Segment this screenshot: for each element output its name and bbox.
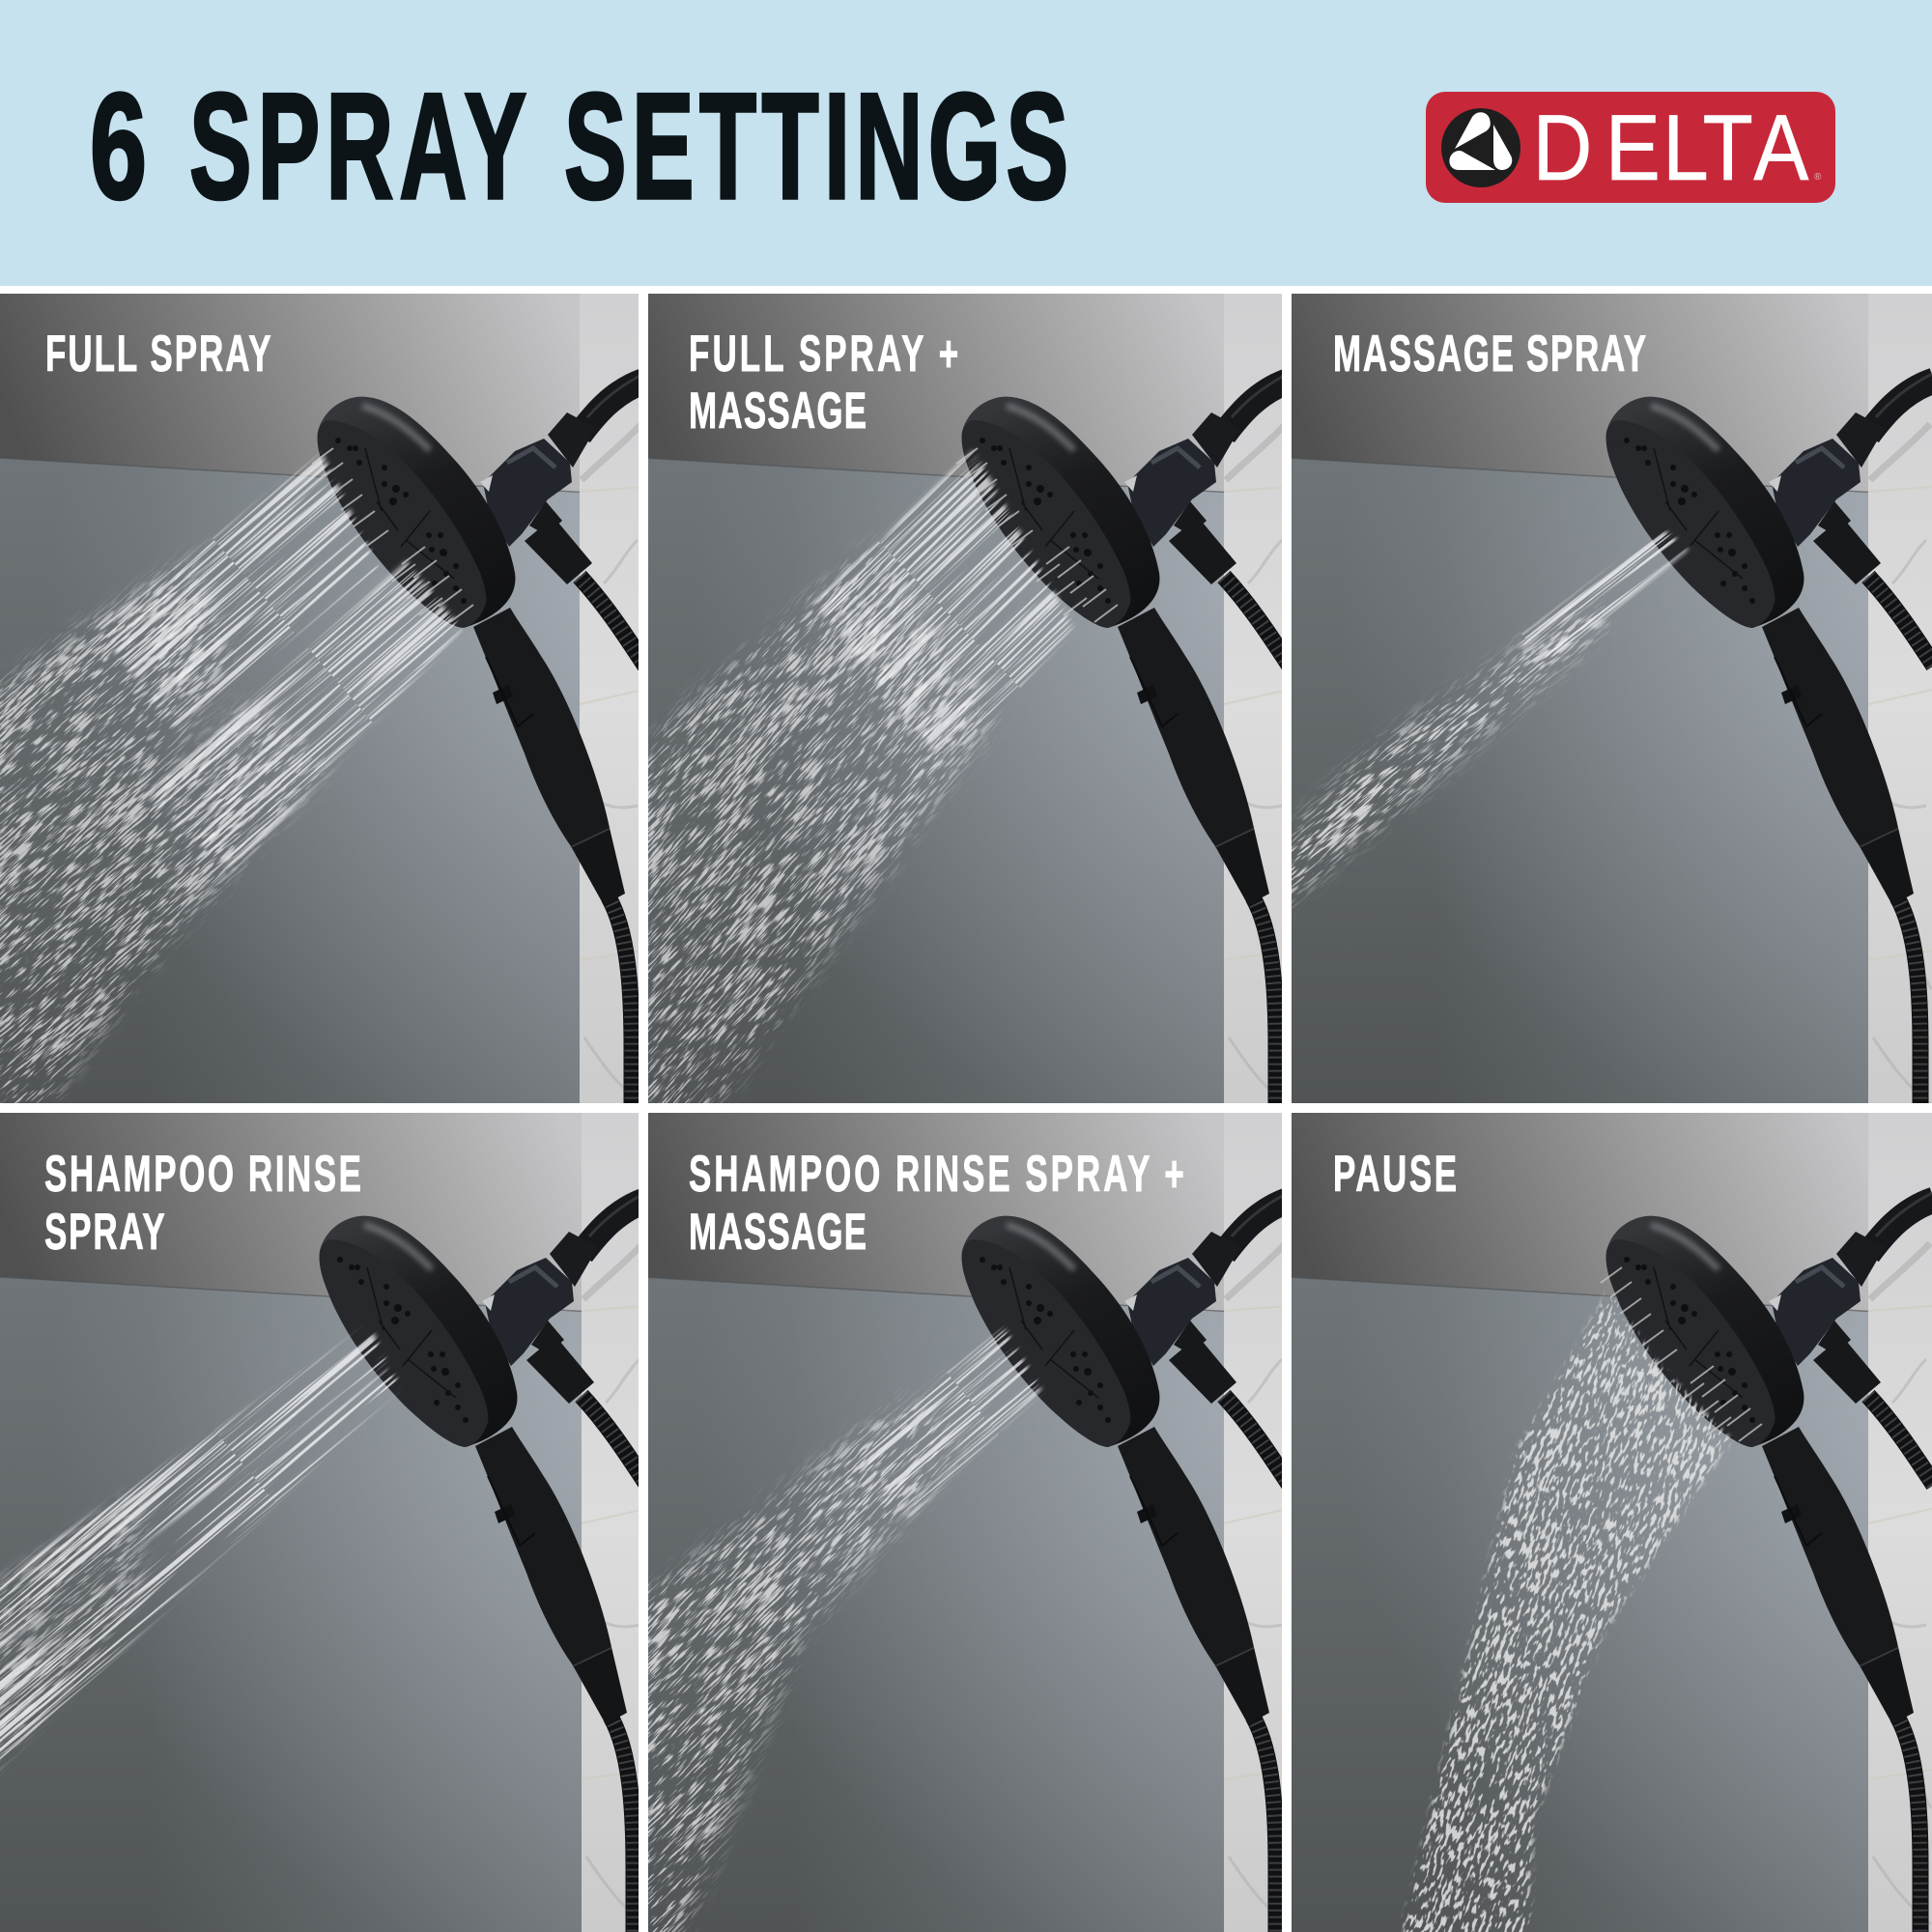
shower head: [962, 1192, 1290, 1932]
panel: shampoo rinse spray: [0, 1113, 639, 1932]
panel: full spray: [0, 294, 639, 1103]
header band: [0, 0, 1932, 286]
label: SHAMPOO RINSE SPRAY +: [689, 1145, 1184, 1203]
label: FULL SPRAY +: [689, 325, 958, 383]
label: MASSAGE: [689, 1203, 867, 1261]
label: FULL SPRAY: [45, 325, 271, 383]
title: SETTINGS: [564, 62, 1068, 231]
label: SPRAY: [44, 1203, 165, 1261]
water spray: [1292, 529, 1690, 909]
wall background: [0, 294, 643, 1113]
logo: Delta: DELTA: [1533, 96, 1808, 200]
label: [44, 1145, 361, 1261]
wall background: [1287, 1113, 1932, 1932]
logo: Delta: ®: [1814, 172, 1822, 183]
shower head: [1606, 1192, 1932, 1932]
shower head: [962, 373, 1290, 1113]
water spray: [1401, 1266, 1762, 1932]
shower head: [320, 1192, 647, 1932]
shower head: [318, 373, 645, 1113]
wall background: [0, 1113, 645, 1932]
water spray: [648, 447, 1119, 1103]
water spray: [0, 447, 473, 1103]
logo: Delta: [1426, 92, 1835, 203]
water spray: [648, 1325, 1044, 1932]
panel: full spray + massage: [648, 294, 1282, 1103]
shower head: [1606, 373, 1932, 1113]
label: SHAMPOO RINSE: [44, 1145, 361, 1203]
title: SPRAY: [189, 62, 526, 231]
panel: shampoo rinse spray + massage: [648, 1113, 1282, 1932]
wall background: [1287, 294, 1932, 1113]
label: PAUSE: [1333, 1145, 1457, 1203]
label: MASSAGE: [689, 382, 867, 440]
panel: pause: [1292, 1113, 1932, 1932]
title: 6: [90, 63, 147, 231]
label: [689, 325, 958, 440]
panel: massage spray: [1292, 294, 1932, 1103]
label: MASSAGE SPRAY: [1333, 325, 1646, 383]
label: [689, 1145, 1184, 1261]
title: [90, 62, 1068, 231]
water spray: [0, 1329, 401, 1772]
wall background: [642, 294, 1288, 1113]
wall background: [642, 1113, 1288, 1932]
